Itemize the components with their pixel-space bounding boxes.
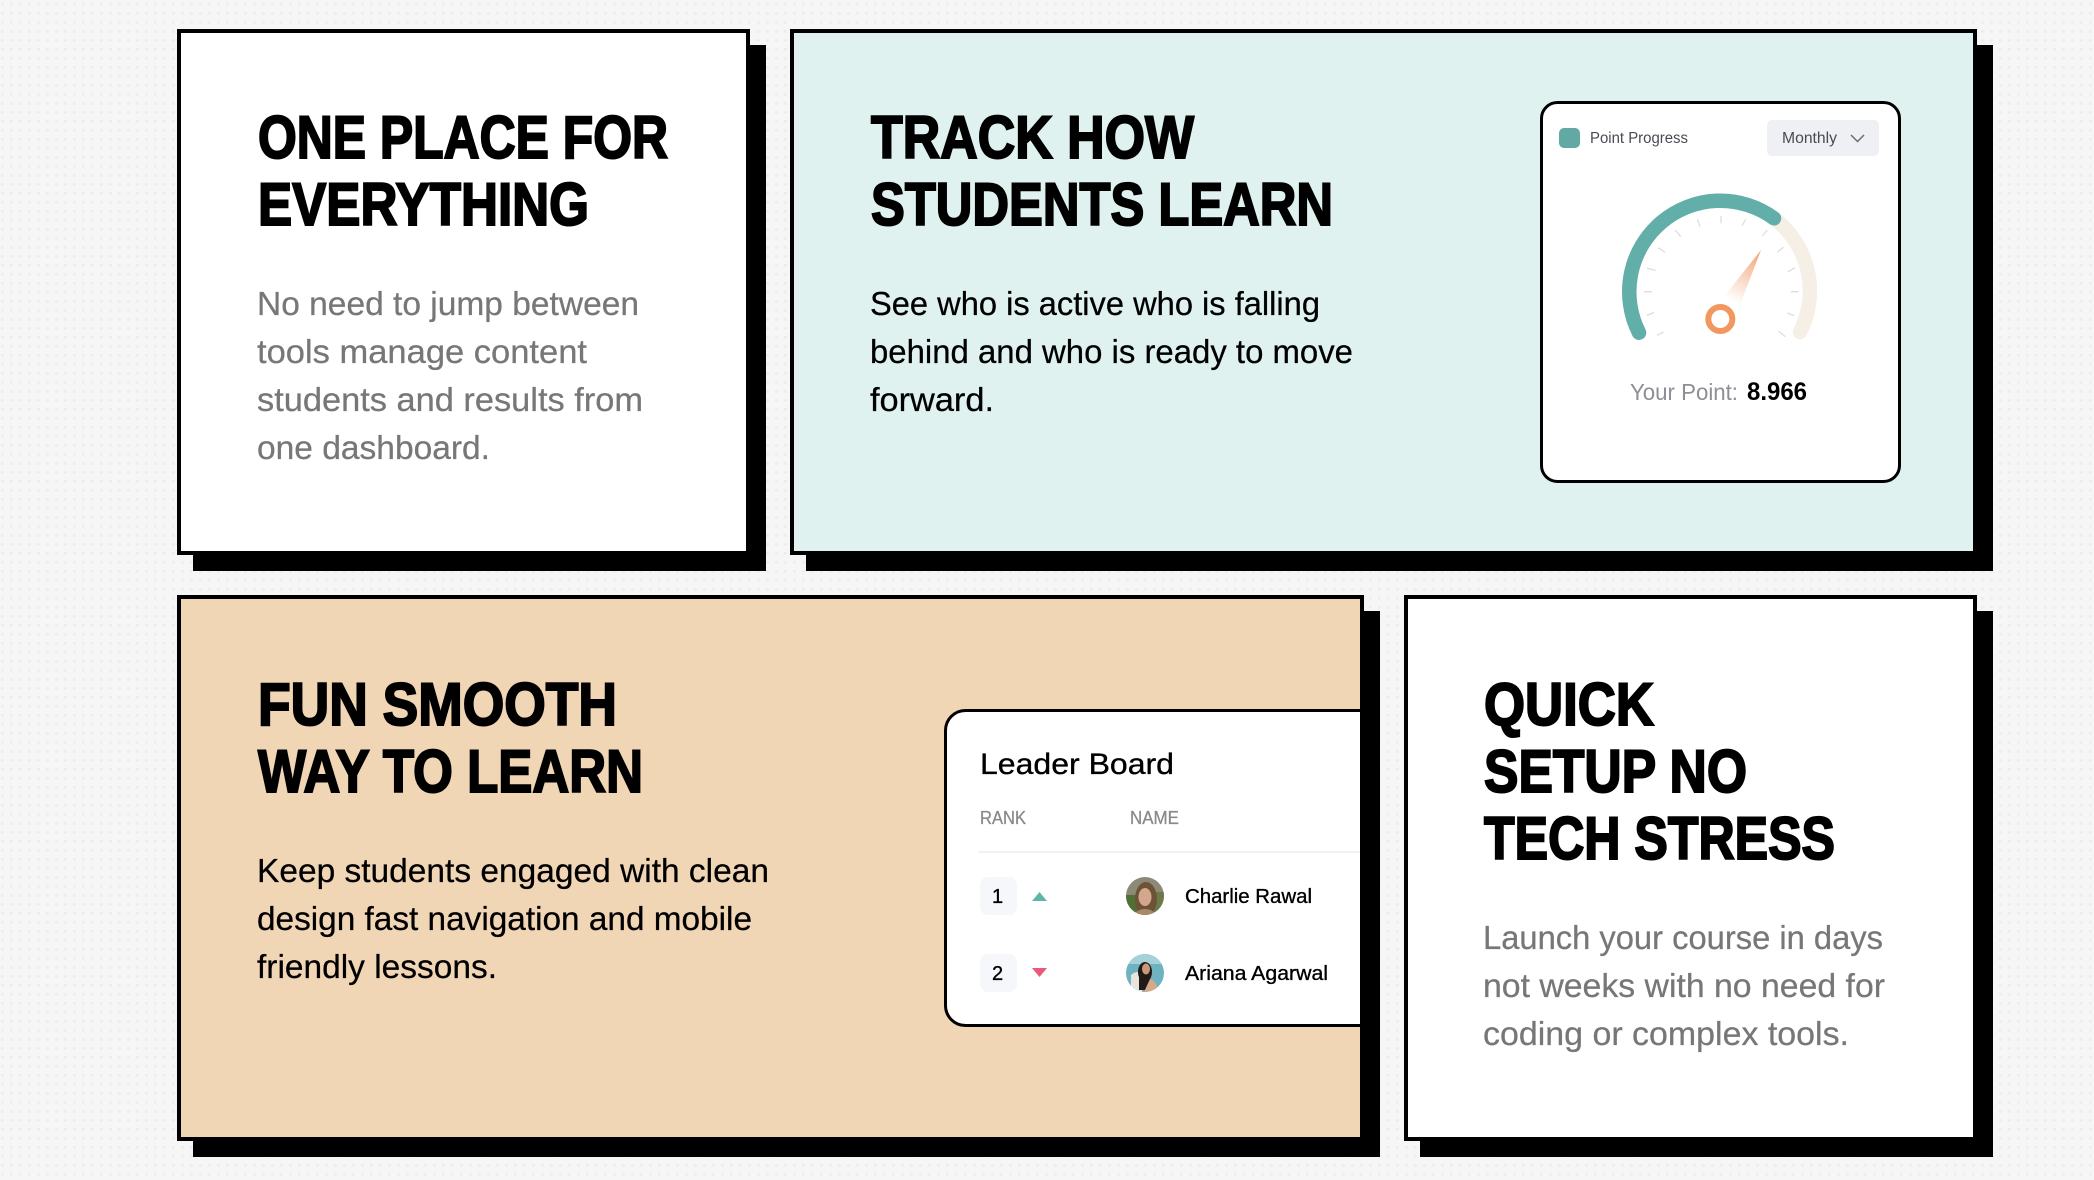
heading: quick setup no tech stress — [1484, 671, 1835, 872]
text: quick setup description — [1483, 919, 1885, 1052]
table header: NAME — [1130, 808, 1179, 828]
widget: point progress gauge — [1542, 102, 1900, 482]
text: track description: behind and who is ready to move — [870, 333, 1353, 370]
heading: track how students learn — [871, 104, 1333, 238]
row: Ariana Agarwal: 2 — [992, 963, 1003, 985]
icon: legend swatch — [1559, 128, 1580, 148]
row: Ariana Agarwal: Ariana Agarwal — [1185, 963, 1328, 985]
heading: quick setup no tech stress: TECH STRESS — [1484, 805, 1835, 872]
heading: fun smooth way to learn — [258, 671, 643, 805]
heading: track how students learn: TRACK HOW — [871, 104, 1194, 171]
text: quick setup description: Launch your course in days — [1483, 919, 1883, 956]
label: your point: 8.966 — [1747, 378, 1807, 406]
row: Charlie Rawal: Charlie Rawal — [1185, 886, 1312, 908]
table header: RANK — [980, 808, 1026, 828]
text: fun smooth description: Keep students engaged with clean — [257, 852, 769, 889]
dropdown: monthly: Monthly — [1782, 130, 1837, 147]
chart: gauge — [1629, 201, 1810, 337]
heading: fun smooth way to learn: WAY TO LEARN — [258, 738, 643, 805]
heading: quick setup no tech stress: QUICK — [1484, 671, 1654, 738]
panel: fun smooth way to learn — [179, 597, 1446, 1157]
row: Charlie Rawal: 1 — [992, 886, 1003, 908]
table header — [978, 808, 1368, 853]
text: one place description: one dashboard. — [257, 429, 490, 466]
label: point progress: Point Progress — [1590, 130, 1688, 147]
text: track description: forward. — [870, 381, 994, 418]
text: quick setup description: coding or complex tools. — [1483, 1015, 1849, 1052]
title: leader board: Leader Board — [980, 748, 1174, 781]
row: Ariana Agarwal — [980, 954, 1328, 992]
text: one place description: No need to jump between — [257, 285, 639, 322]
panel: one place for everything — [179, 31, 766, 571]
heading: one place for everything: ONE PLACE FOR — [258, 104, 668, 171]
heading: quick setup no tech stress: SETUP NO — [1484, 738, 1747, 805]
panel: track how students learn — [792, 31, 1993, 571]
dropdown: monthly — [1767, 120, 1879, 156]
text: one place description: students and results from — [257, 381, 643, 418]
panel: quick setup no tech stress — [1406, 597, 1993, 1157]
text: fun smooth description: design fast navigation and mobile — [257, 900, 752, 937]
heading: fun smooth way to learn: FUN SMOOTH — [258, 671, 617, 738]
heading: track how students learn: STUDENTS LEARN — [871, 171, 1333, 238]
heading: one place for everything: EVERYTHING — [258, 171, 589, 238]
widget: leader board — [944, 709, 1360, 1027]
text: one place description: tools manage content — [257, 333, 587, 370]
row: Charlie Rawal — [980, 877, 1312, 916]
text: track description — [870, 285, 1353, 418]
label: your point — [1630, 378, 1807, 406]
text: quick setup description: not weeks with no need for — [1483, 967, 1885, 1004]
text: one place description — [257, 285, 643, 466]
label: your point: Your Point: — [1630, 379, 1738, 405]
text: fun smooth description — [257, 852, 769, 985]
text: fun smooth description: friendly lessons. — [257, 948, 497, 985]
heading: one place for everything — [258, 104, 668, 238]
text: track description: See who is active who is falling — [870, 285, 1320, 322]
